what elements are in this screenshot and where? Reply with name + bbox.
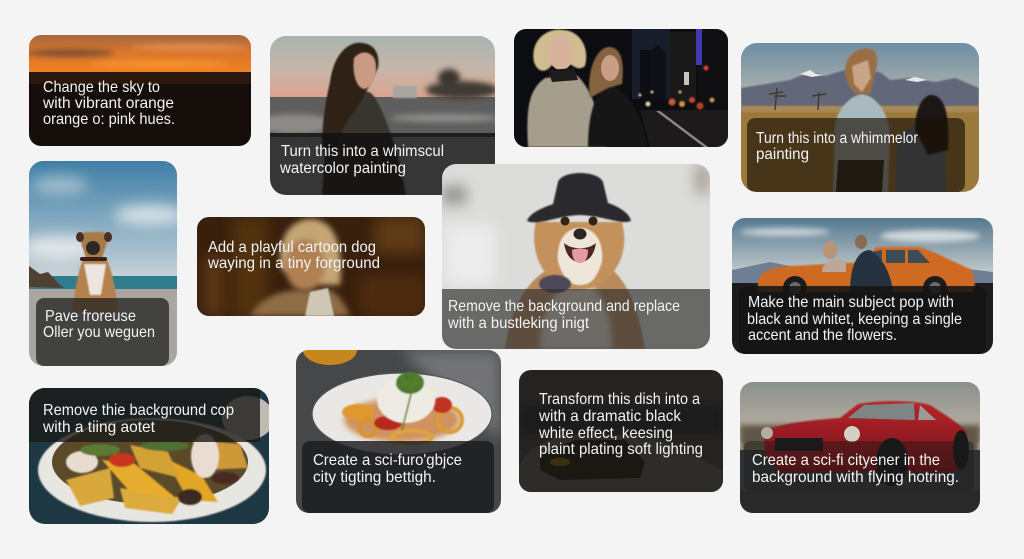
caption overlay [270, 133, 495, 195]
panel: hikers and mountains prompt [741, 43, 979, 192]
panel: sunset sky prompt [26, 35, 251, 146]
photo: red classic sports car [740, 382, 980, 513]
caption text [279, 143, 444, 177]
caption text [752, 452, 959, 486]
panel: dog on beach prompt [29, 161, 177, 366]
caption text: with a tiing aotet [42, 419, 156, 436]
caption overlay [29, 84, 251, 146]
panel: two women at night city street [514, 29, 728, 147]
caption text: black and whitet, keeping a single [747, 311, 962, 328]
photo: woman on beach at dusk [255, 36, 500, 195]
caption text: with a bustleking inigt [447, 315, 590, 332]
photo: stir-fried dish on white plate [29, 388, 274, 524]
photo: two people in front of mountains [741, 43, 979, 192]
caption text: Create a sci-furo'gbjce [313, 452, 462, 469]
caption text: Oller you weguen [43, 324, 155, 341]
caption text [313, 452, 462, 486]
caption text [748, 296, 962, 340]
caption overlay [36, 298, 169, 366]
caption text [538, 391, 703, 458]
caption overlay [756, 286, 976, 294]
caption text [42, 402, 234, 436]
caption overlay [442, 289, 710, 349]
caption text: Turn this into a whimmelor [756, 130, 918, 147]
panel: pasta plate prompt [296, 335, 501, 513]
caption text: white effect, keesing [538, 425, 673, 442]
caption text: Add a playful cartoon dog [208, 239, 376, 256]
caption text: watercolor painting [279, 160, 406, 177]
caption text: Pave froreuse [45, 308, 136, 325]
photo: people by orange car [732, 218, 993, 354]
caption overlay [29, 388, 260, 442]
photo: dog sitting on beach [29, 161, 177, 366]
panel: dark dish prompt [519, 370, 723, 492]
photo: city night street [514, 29, 728, 147]
caption text: orange o: pink hues. [43, 111, 175, 128]
caption text: with vibrant orange [42, 95, 174, 112]
caption text: Turn this into a whimscul [281, 143, 444, 160]
panel: dog with hat prompt [442, 164, 710, 349]
caption text: city tigting bettigh. [313, 469, 436, 486]
caption text [756, 130, 918, 163]
caption text: background with flying hotring. [752, 469, 959, 486]
caption overlay [302, 441, 494, 513]
caption text [207, 239, 380, 272]
panel: red sports car prompt [740, 382, 980, 513]
caption overlay [747, 118, 965, 192]
panel: woman on the shore prompt [255, 36, 500, 195]
caption text [43, 308, 155, 341]
caption text [42, 79, 175, 128]
caption text: Transform this dish into a [539, 391, 700, 408]
caption text: Change the sky to [43, 79, 160, 96]
caption text: Create a sci-fi cityener in the [752, 452, 940, 469]
photo: orange sunset sky [26, 35, 251, 75]
caption text: painting [756, 146, 809, 163]
caption text: Remove thie background cop [43, 402, 234, 419]
panel: orange car prompt [732, 218, 993, 354]
panel: stir-fry plate prompt [29, 388, 274, 524]
photo: blurred woman in warm interior [197, 217, 425, 316]
panel: blurred woman prompt [197, 217, 425, 316]
photo: faint dark car on road [519, 370, 723, 492]
caption text: with a dramatic black [538, 408, 681, 425]
caption text: Remove the background and replace [448, 298, 680, 315]
caption text: waying in a tiny forground [207, 255, 380, 272]
caption text [447, 298, 680, 332]
photo: pasta with rice and herbs [296, 335, 501, 513]
caption overlay [744, 441, 974, 491]
caption text: plaint plating soft lighting [539, 441, 703, 458]
caption text: accent and the flowers. [748, 327, 897, 344]
photo: smiling dog wearing black hat [442, 164, 710, 349]
caption text: Make the main subject pop with [748, 294, 954, 311]
